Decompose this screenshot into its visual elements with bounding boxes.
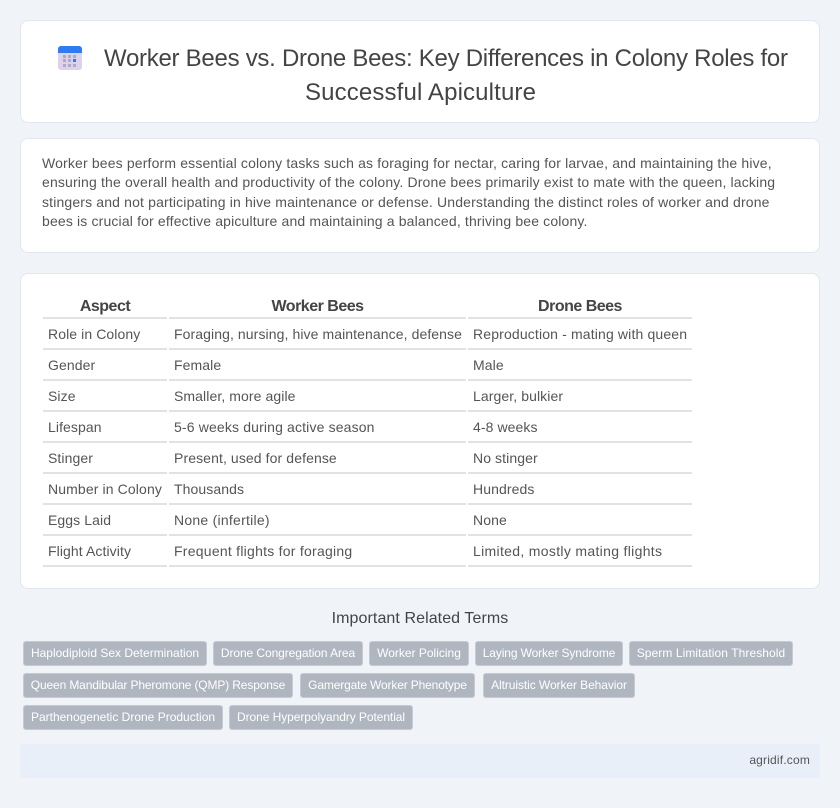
text: None (infertile) [174, 512, 270, 528]
comparison table [43, 298, 693, 568]
title: Successful Apiculture [305, 79, 536, 106]
text: Limited, mostly mating flights [473, 543, 662, 559]
tag: Queen Mandibular Pheromone (QMP) Response [23, 673, 293, 698]
text: Smaller, more agile [174, 388, 296, 404]
text: Worker Bees [271, 298, 364, 315]
tag: Drone Hyperpolyandry Potential [229, 705, 413, 730]
tag: Haplodiploid Sex Determination [23, 641, 207, 666]
header panel [20, 20, 820, 123]
row: flight activity: Flight Activity [48, 543, 131, 559]
related terms heading: Important Related Terms [332, 610, 508, 627]
tag: Altruistic Worker Behavior [483, 673, 635, 698]
tag: Sperm Limitation Threshold [629, 641, 793, 666]
row: number in colony: Number in Colony [48, 481, 162, 497]
panel: intro paragraph [20, 138, 820, 253]
text: None [473, 512, 507, 528]
icon: calendar [58, 46, 82, 70]
title [104, 45, 788, 106]
table header: Aspect [80, 298, 130, 315]
tag: Queen Mandibular Pheromone (QMP) Response: Queen Mandibular Pheromone (QMP) Response [31, 678, 285, 692]
text: Male [473, 357, 504, 373]
intro text: bees is crucial for effective apiculture and maintaining a balanced, thriving bee colony. [42, 213, 588, 229]
footer source: agridif.com [749, 753, 810, 767]
tag: Parthenogenetic Drone Production [23, 705, 223, 730]
row: gender: Gender [48, 357, 95, 373]
intro text [42, 155, 775, 229]
row: eggs laid: Eggs Laid [48, 512, 111, 528]
text: Thousands [174, 481, 244, 497]
text: Reproduction - mating with queen [473, 326, 687, 342]
text: Drone Bees [538, 298, 622, 315]
tag: Sperm Limitation Threshold: Sperm Limitation Threshold [637, 646, 785, 660]
panel: comparison table [20, 273, 820, 589]
text: Foraging, nursing, hive maintenance, defense [174, 326, 462, 342]
tag: Parthenogenetic Drone Production: Parthenogenetic Drone Production [31, 710, 215, 724]
text: 4-8 weeks [473, 419, 538, 435]
tag: Haplodiploid Sex Determination: Haplodiploid Sex Determination [31, 646, 199, 660]
intro text: ensuring the overall health and productivity of the colony. Drone bees primarily exist to mate with the queen, lacking [42, 174, 775, 190]
tag: Laying Worker Syndrome [475, 641, 623, 666]
title: Worker Bees vs. Drone Bees: Key Differences in Colony Roles for [104, 45, 788, 72]
tag: Drone Congregation Area: Drone Congregation Area [221, 646, 355, 660]
row: size: Size [48, 388, 76, 404]
tag: Drone Congregation Area [213, 641, 363, 666]
text: 5-6 weeks during active season [174, 419, 375, 435]
row: stinger: Stinger [48, 450, 93, 466]
tag: Worker Policing: Worker Policing [377, 646, 461, 660]
tag: Worker Policing [369, 641, 469, 666]
text: Frequent flights for foraging [174, 543, 352, 559]
text: Present, used for defense [174, 450, 337, 466]
text: Female [174, 357, 221, 373]
text: Larger, bulkier [473, 388, 563, 404]
tag: Laying Worker Syndrome: Laying Worker Syndrome [483, 646, 615, 660]
tag: Altruistic Worker Behavior: Altruistic Worker Behavior [491, 678, 627, 692]
intro text: Worker bees perform essential colony tasks such as foraging for nectar, caring for larvae, and maintaining the hive, [42, 155, 772, 171]
tag: Gamergate Worker Phenotype: Gamergate Worker Phenotype [308, 678, 467, 692]
row: lifespan: Lifespan [48, 419, 102, 435]
tag: Gamergate Worker Phenotype [300, 673, 475, 698]
row: role in colony: Role in Colony [48, 326, 140, 342]
intro text: stingers and not participating in hive maintenance or defense. Understanding the distinct roles of worker and drone [42, 194, 770, 210]
footer bar [20, 744, 820, 778]
text: No stinger [473, 450, 538, 466]
text: Hundreds [473, 481, 534, 497]
tag: Drone Hyperpolyandry Potential: Drone Hyperpolyandry Potential [237, 710, 405, 724]
